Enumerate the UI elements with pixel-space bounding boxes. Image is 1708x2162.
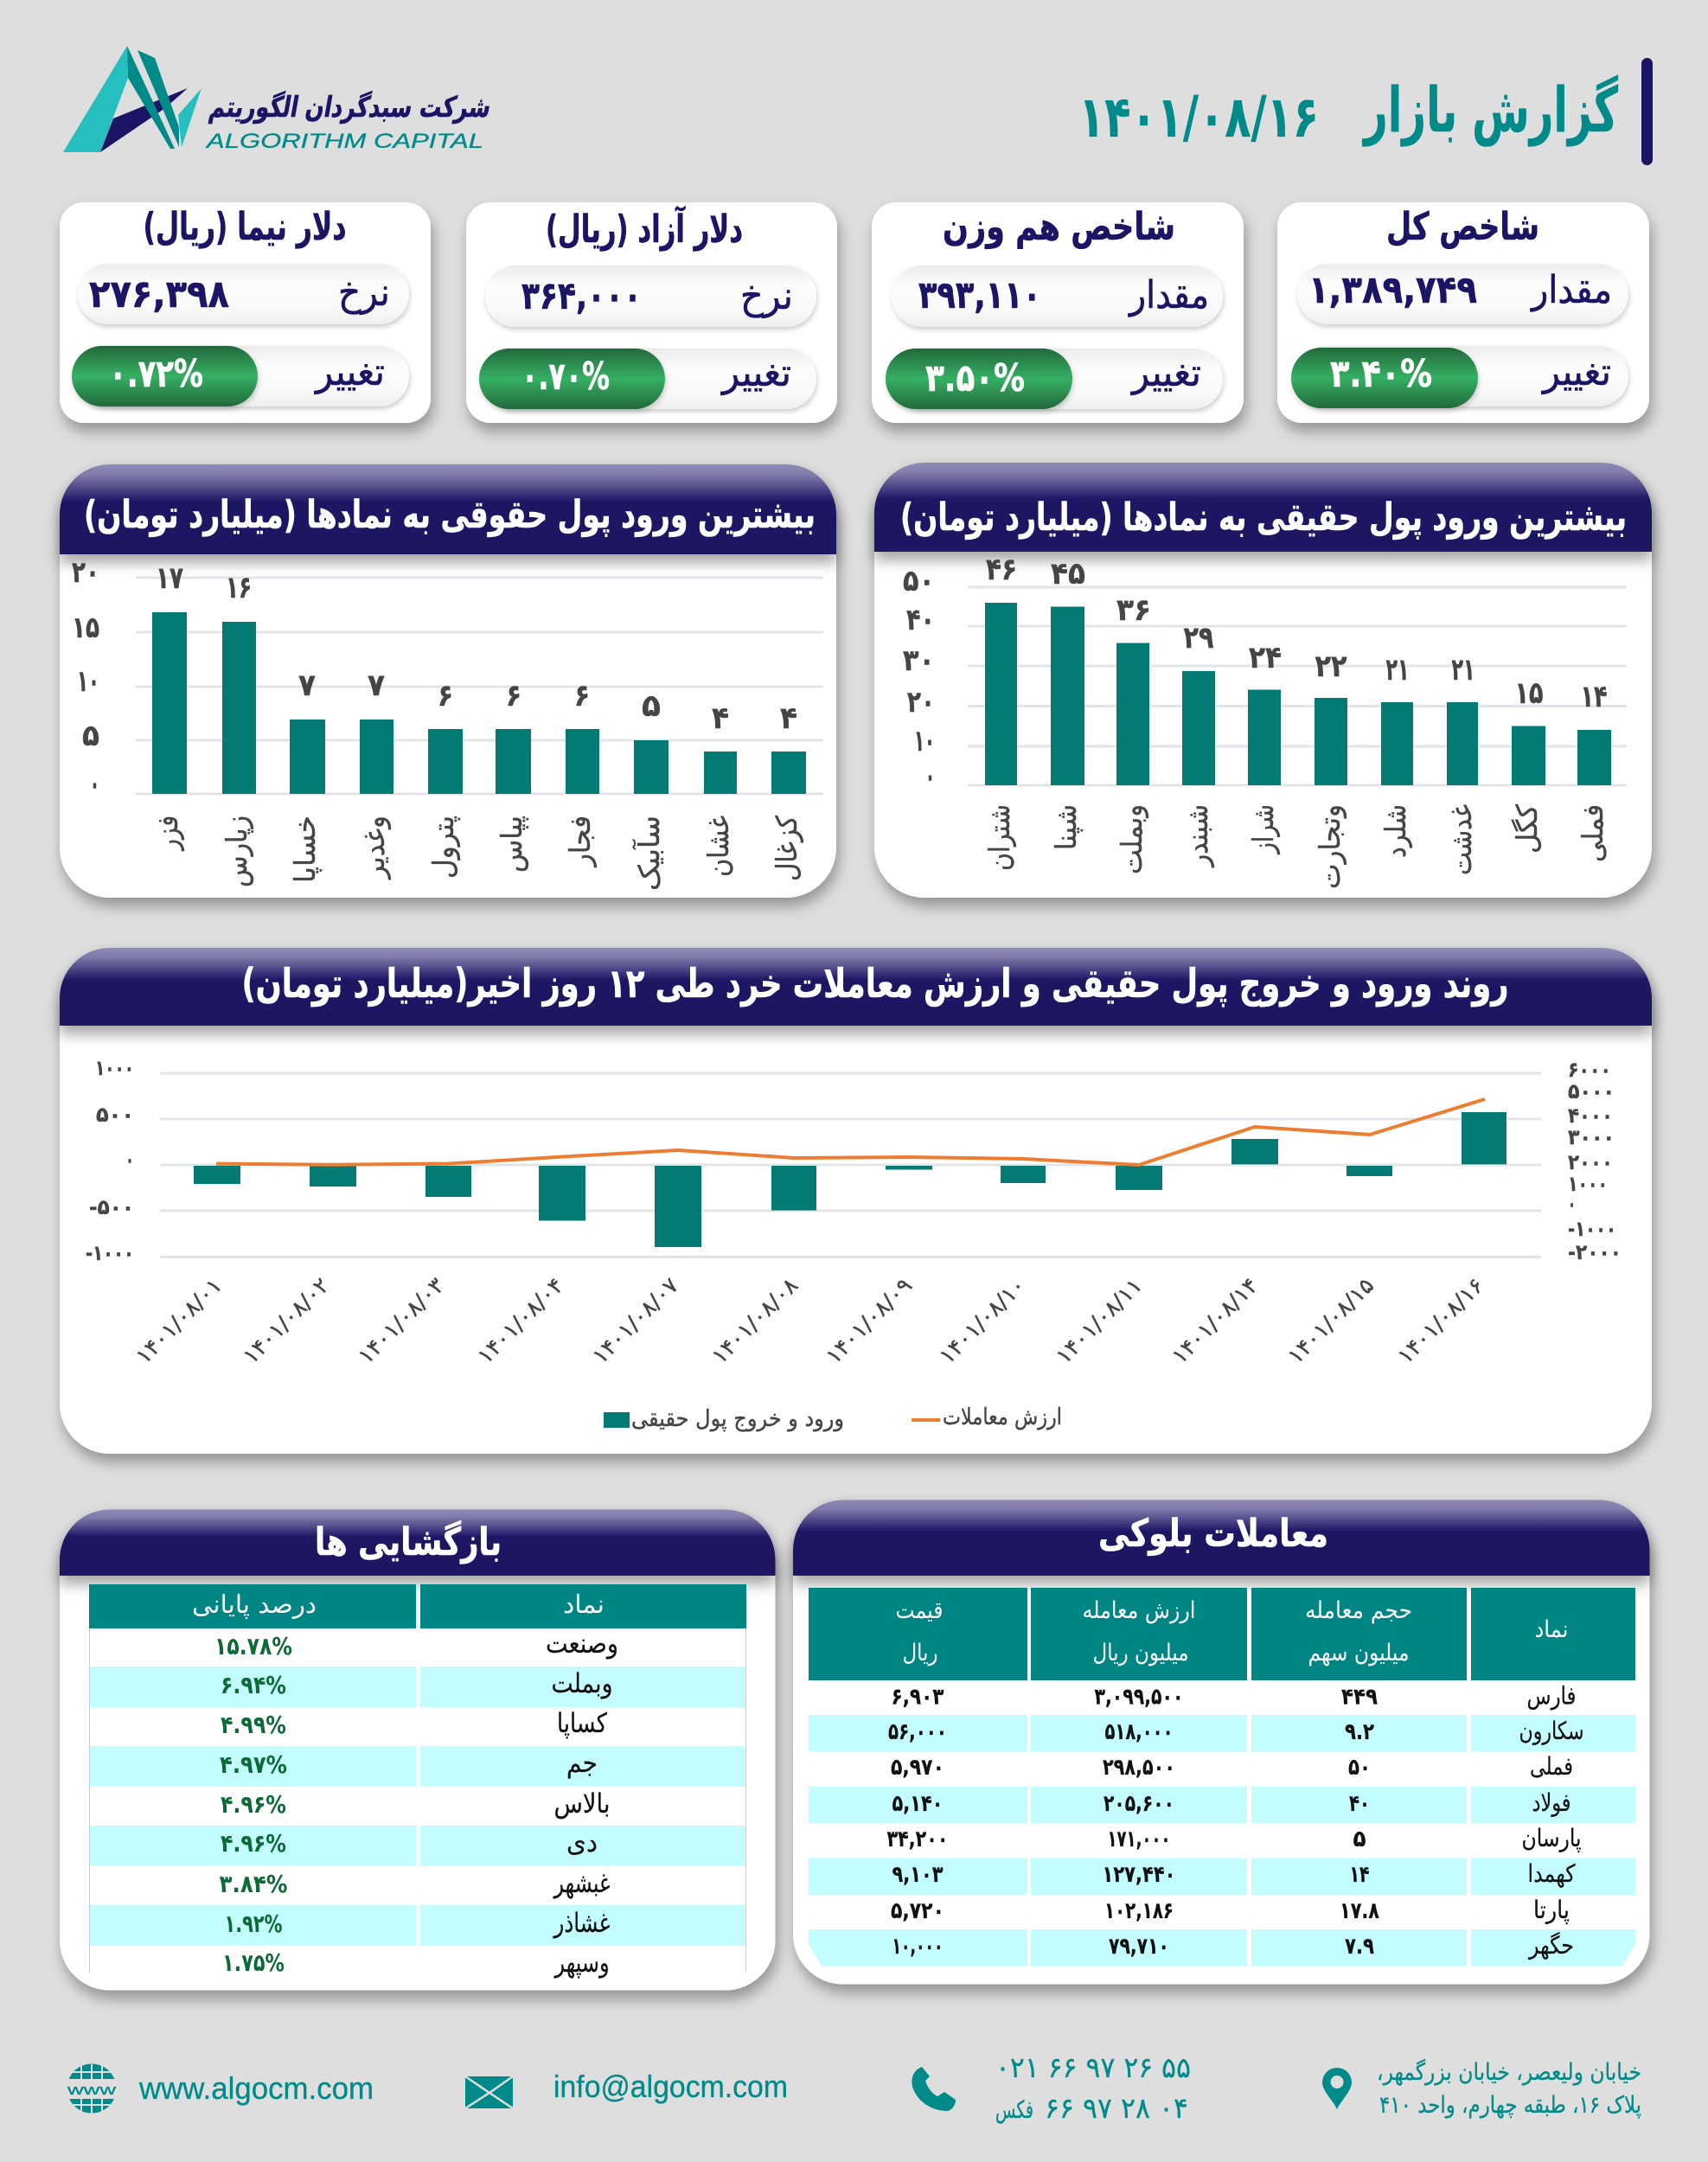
table percent column [214, 1632, 292, 1977]
fax label: فکس [995, 2095, 1033, 2124]
table percent column: ۱.۹۲% [225, 1909, 282, 1938]
symbol column: فملی [1530, 1752, 1573, 1781]
volume column: ۴۰ [1349, 1791, 1370, 1817]
left y axis labels: -۵۰۰ [89, 1195, 134, 1219]
bar values [156, 561, 797, 736]
table percent column: ۱.۷۵% [222, 1948, 285, 1977]
footer: email [465, 2069, 788, 2108]
logo persian name: شرکت سبدگردان الگوریتم [207, 90, 494, 125]
legend: ارزش معاملات [943, 1404, 1062, 1430]
table header: نماد [1534, 1616, 1569, 1643]
panel title: معاملات بلوکی [1098, 1512, 1328, 1556]
panel: 12 day trend chart [60, 948, 1652, 1454]
address line 1: خیابان ولیعصر، خیابان بزرگمهر، [1377, 2058, 1641, 2086]
x axis date labels: ۱۴۰۱/۰۸/۱۴ [1167, 1273, 1263, 1369]
footer: website [66, 2063, 374, 2114]
bar values: ۱۴ [1581, 680, 1607, 714]
left y axis labels: ۵۰۰ [96, 1103, 134, 1127]
card: dollar nima [60, 202, 431, 423]
x axis date labels: ۱۴۰۱/۰۸/۰۲ [238, 1273, 334, 1369]
price column: ۵,۷۲۰ [891, 1898, 944, 1924]
email text: info@algocm.com [553, 2069, 788, 2104]
card title: دلار نیما (ریال) [144, 205, 346, 249]
bar values: ۴۵ [1051, 557, 1085, 592]
y axis labels: ۴۰ [906, 603, 935, 637]
rate pill [485, 265, 816, 327]
change pill: ۰.۷۰% [521, 355, 610, 399]
y axis labels [903, 564, 935, 794]
bar values: ۶ [506, 679, 521, 713]
icon: envelope [465, 2076, 513, 2108]
panel header [60, 1510, 775, 1576]
x axis date labels: ۱۴۰۱/۰۸/۰۴ [472, 1273, 568, 1369]
right y axis labels: ۳۰۰۰ [1568, 1125, 1615, 1149]
table header: قیمت [896, 1597, 943, 1624]
x axis date labels: ۱۴۰۱/۰۸/۱۶ [1392, 1273, 1488, 1369]
table header [89, 1584, 746, 1628]
icon: globe: www [66, 2082, 117, 2098]
bar values: ۴ [712, 701, 729, 736]
value pill [1297, 264, 1628, 324]
x axis symbol labels: پپاس [495, 816, 528, 873]
right y axis labels: ۶۰۰۰ [1568, 1058, 1611, 1082]
table header: ارزش معامله [1083, 1597, 1195, 1624]
legend: ورود و خروج پول حقیقی [631, 1406, 844, 1432]
table header: ریال [903, 1640, 937, 1666]
panel header [60, 948, 1652, 1026]
table symbol column: جم [566, 1748, 598, 1779]
x axis symbol labels: فزر [150, 816, 184, 852]
change pill: ۳.۴۰% [1330, 352, 1432, 396]
volume column [1340, 1685, 1379, 1960]
logo mark [63, 46, 202, 152]
grid lines [160, 1073, 1541, 1257]
right y axis labels: ۴۰۰۰ [1568, 1103, 1613, 1128]
value pill: مقدار [1530, 268, 1612, 312]
right y axis labels: ۰ [1568, 1192, 1576, 1216]
panel title: بیشترین ورود پول حقوقی به نمادها (میلیارد تومان) [84, 493, 816, 537]
footer: address [1322, 2058, 1641, 2119]
table header: میلیون سهم [1308, 1640, 1410, 1666]
value column: ۱۲۷,۴۴۰ [1102, 1862, 1176, 1888]
y axis labels: ۱۰ [914, 724, 935, 758]
panel: legal money inflow chart [60, 464, 836, 898]
table header: میلیون ریال [1093, 1640, 1188, 1666]
change pill [72, 346, 409, 406]
y axis labels: ۲۰ [72, 555, 99, 590]
footer: phone [912, 2050, 1191, 2125]
x axis date labels: ۱۴۰۱/۰۸/۰۳ [353, 1273, 449, 1369]
bar values: ۱۶ [226, 571, 252, 605]
grid lines [136, 578, 823, 794]
y axis labels: ۱۰ [77, 664, 99, 699]
icon: phone [912, 2067, 956, 2111]
y axis labels: ۵۰ [903, 564, 935, 598]
x axis date labels: ۱۴۰۱/۰۸/۱۱ [1051, 1273, 1147, 1369]
x axis date labels: ۱۴۰۱/۰۸/۰۸ [707, 1273, 803, 1369]
table symbol column [546, 1628, 618, 1979]
x axis symbol labels: شراز [1246, 804, 1280, 855]
table symbol column: وصنعت [546, 1628, 618, 1660]
symbol column: حگهر [1527, 1931, 1574, 1960]
icon: globe [66, 2063, 118, 2114]
y axis labels: ۱۵ [72, 611, 99, 645]
symbol column: پارتا [1533, 1896, 1570, 1924]
card title: شاخص هم وزن [943, 205, 1175, 249]
symbol column: پارسان [1522, 1824, 1581, 1852]
symbol column: فولاد [1532, 1788, 1570, 1817]
line: trading value [216, 1099, 1485, 1165]
card title: دلار آزاد (ریال) [546, 205, 743, 252]
bar values: ۱۵ [1515, 676, 1543, 711]
change pill [886, 349, 1223, 409]
change pill: تغییر [1130, 351, 1201, 395]
table header: درصد پایانی [192, 1590, 317, 1620]
bar values: ۴ [780, 701, 797, 736]
table header [809, 1588, 1635, 1680]
right y axis labels: -۱۰۰۰ [1568, 1217, 1616, 1241]
price column: ۵,۱۴۰ [892, 1791, 943, 1817]
table percent column: ۴.۹۹% [221, 1711, 286, 1739]
table percent column: ۴.۹۶% [221, 1829, 286, 1858]
right y axis labels: ۱۰۰۰ [1568, 1172, 1608, 1196]
address line 2: پلاک ۱۶، طبقه چهارم، واحد ۴۱۰ [1379, 2092, 1641, 2119]
x axis symbol labels: شلرد [1379, 804, 1412, 858]
value pill: مقدار [1128, 273, 1209, 317]
value column: ۱۰۲,۱۸۶ [1104, 1898, 1174, 1924]
table percent column: ۳.۸۴% [220, 1870, 287, 1898]
x axis symbol labels [982, 804, 1609, 889]
table row shading [89, 1628, 746, 1973]
change pill [1291, 346, 1628, 408]
table header: حجم معامله [1305, 1597, 1412, 1624]
rate pill [78, 264, 409, 324]
volume column: ۹.۲ [1345, 1719, 1374, 1745]
logo [63, 46, 494, 153]
x axis symbol labels [150, 816, 803, 891]
x axis symbol labels: فملی [1576, 804, 1609, 862]
bar values: ۷ [298, 668, 316, 703]
change pill [479, 349, 816, 409]
logo english name: ALGORITHM CAPITAL [204, 130, 483, 153]
panel title: بازگشایی ها [315, 1519, 502, 1564]
table symbol column: وبملت [552, 1668, 612, 1699]
bar values: ۲۴ [1249, 641, 1282, 675]
table percent column: ۴.۹۷% [220, 1750, 287, 1779]
table percent column: ۴.۹۶% [221, 1790, 286, 1819]
title accent bar [1641, 58, 1653, 165]
value column: ۳,۰۹۹,۵۰۰ [1095, 1685, 1183, 1711]
table symbol column: غشاذر [553, 1908, 611, 1939]
y axis labels: ۵ [82, 719, 99, 753]
x axis symbol labels: خساپا [288, 816, 322, 883]
table percent column: ۶.۹۴% [221, 1671, 286, 1699]
right y axis labels: ۲۰۰۰ [1568, 1150, 1613, 1174]
x axis symbol labels: شبندر [1180, 804, 1214, 868]
price column [887, 1685, 948, 1960]
x axis symbol labels: وتجارت [1313, 804, 1347, 889]
volume column: ۱۷.۸ [1340, 1898, 1379, 1924]
value pill: ۱,۳۸۹,۷۴۹ [1308, 268, 1477, 312]
y axis labels: ۲۰ [907, 685, 935, 720]
bar values: ۲۱ [1451, 653, 1475, 688]
price column: ۶,۹۰۳ [891, 1685, 944, 1711]
y axis labels [72, 555, 99, 802]
y axis labels: ۳۰ [903, 643, 935, 678]
right y axis labels [1568, 1058, 1622, 1264]
panel: real money inflow chart [874, 463, 1652, 898]
change pill: ۳.۵۰% [925, 356, 1025, 400]
icon: map pin [1322, 2068, 1352, 2109]
panel: reopenings table [60, 1510, 775, 1991]
change pill: تغییر [1541, 350, 1611, 394]
price column: ۱۰,۰۰۰ [892, 1934, 943, 1960]
table symbol column: بالاس [553, 1788, 611, 1820]
value column [1095, 1685, 1183, 1960]
price column: ۹,۱۰۳ [892, 1862, 944, 1888]
panel header [60, 464, 836, 554]
report title [1078, 58, 1653, 165]
value column: ۵۱۸,۰۰۰ [1105, 1719, 1173, 1745]
left y axis labels: -۱۰۰۰ [86, 1241, 134, 1265]
x axis symbol labels: زپارس [220, 816, 253, 887]
x axis date labels [131, 1273, 1488, 1369]
panel header [874, 463, 1652, 552]
bars: money flow [194, 1112, 1506, 1247]
table symbol column: وسپهر [553, 1948, 609, 1979]
x axis symbol labels: کگل [1510, 804, 1544, 854]
x axis date labels: ۱۴۰۱/۰۸/۰۷ [587, 1273, 683, 1369]
bar values: ۴۶ [986, 553, 1017, 587]
table symbol column: کساپا [557, 1708, 607, 1739]
x axis date labels: ۱۴۰۱/۰۸/۱۰ [934, 1273, 1030, 1369]
change pill: ۰.۷۲% [109, 352, 203, 396]
bar values: ۵ [642, 689, 661, 724]
change pill: تغییر [314, 350, 385, 394]
x axis symbol labels: شپنا [1049, 804, 1083, 850]
bar values: ۲۲ [1315, 649, 1347, 684]
bars [985, 603, 1611, 785]
value column: ۱۷۱,۰۰۰ [1107, 1826, 1171, 1852]
phone number: ۰۲۱ ۶۶ ۹۷ ۲۶ ۵۵ [995, 2050, 1191, 2084]
card title: شاخص کل [1386, 205, 1539, 249]
symbol column: فارس [1527, 1681, 1576, 1711]
x axis symbol labels: غشان [701, 816, 735, 877]
bar values: ۲۹ [1183, 621, 1214, 656]
symbol column [1519, 1681, 1584, 1960]
rate pill: ۳۶۴,۰۰۰ [521, 274, 642, 318]
bar values: ۱۷ [156, 561, 183, 596]
left y axis labels: ۱۰۰۰ [95, 1056, 134, 1080]
value column: ۷۹,۷۱۰ [1109, 1934, 1169, 1960]
table header: نماد [563, 1590, 605, 1619]
bar values: ۳۶ [1116, 593, 1151, 628]
x axis symbol labels: غدشت [1444, 804, 1478, 875]
x axis symbol labels: کزغال [770, 816, 803, 881]
value pill [892, 265, 1223, 327]
rate pill: ۲۷۶,۳۹۸ [89, 272, 229, 317]
table symbol column: دی [566, 1827, 598, 1858]
x axis symbol labels: وغدیر [357, 816, 391, 880]
x axis date labels: ۱۴۰۱/۰۸/۱۵ [1283, 1273, 1379, 1369]
change pill: تغییر [720, 351, 791, 395]
bar values: ۷ [368, 668, 385, 703]
price column: ۵,۹۷۰ [891, 1755, 944, 1781]
volume column: ۱۴ [1349, 1862, 1370, 1888]
right y axis labels: -۲۰۰۰ [1568, 1240, 1622, 1264]
grid lines [968, 587, 1627, 785]
x axis symbol labels: پترول [426, 816, 460, 879]
x axis date labels: ۱۴۰۱/۰۸/۰۱ [131, 1273, 227, 1369]
bars [152, 612, 806, 794]
value pill: ۳۹۳,۱۱۰ [918, 273, 1041, 317]
x axis symbol labels: شتران [982, 804, 1016, 871]
table percent column: ۱۵.۷۸% [214, 1632, 292, 1660]
volume column: ۷.۹ [1345, 1934, 1374, 1960]
table symbol column: غبشهر [553, 1868, 611, 1899]
left y axis labels [86, 1056, 134, 1265]
website text: www.algocm.com [138, 2070, 374, 2106]
table row shading [809, 1715, 1635, 1967]
price column: ۳۴,۲۰۰ [887, 1826, 948, 1852]
card: equal weight index [872, 202, 1244, 423]
right y axis labels: ۵۰۰۰ [1568, 1079, 1615, 1103]
panel header [793, 1500, 1650, 1576]
card: free dollar [466, 202, 837, 423]
symbol column: کهمدا [1527, 1859, 1576, 1888]
symbol column: سکارون [1519, 1717, 1584, 1745]
volume column: ۵۰ [1348, 1755, 1371, 1781]
bar values [986, 553, 1607, 714]
x axis symbol labels: فجار [563, 816, 597, 868]
price column: ۵۶,۰۰۰ [888, 1719, 947, 1745]
card: total index [1277, 202, 1649, 423]
bar values: ۶ [574, 679, 590, 713]
volume column: ۴۴۹ [1341, 1685, 1378, 1711]
volume column: ۵ [1353, 1826, 1366, 1852]
report date: ۱۴۰۱/۰۸/۱۶ [1078, 84, 1319, 150]
bar values: ۶ [438, 679, 453, 713]
bar values: ۲۱ [1385, 653, 1410, 688]
x axis symbol labels: وبملت [1115, 804, 1148, 874]
x axis symbol labels: سآبیک [632, 816, 666, 891]
left y axis labels: ۰ [125, 1148, 134, 1172]
fax number: ۶۶ ۹۷ ۲۸ ۰۴ [1045, 2091, 1188, 2125]
legend [604, 1404, 1062, 1432]
value column: ۲۹۸,۵۰۰ [1103, 1755, 1175, 1781]
y axis labels: ۰ [925, 759, 935, 794]
value column: ۲۰۵,۶۰۰ [1103, 1791, 1174, 1817]
rate pill: نرخ [740, 274, 793, 318]
panel: block trades table [793, 1500, 1650, 1984]
y axis labels: ۰ [90, 767, 99, 802]
x axis date labels: ۱۴۰۱/۰۸/۰۹ [821, 1273, 917, 1369]
rate pill: نرخ [338, 271, 390, 315]
